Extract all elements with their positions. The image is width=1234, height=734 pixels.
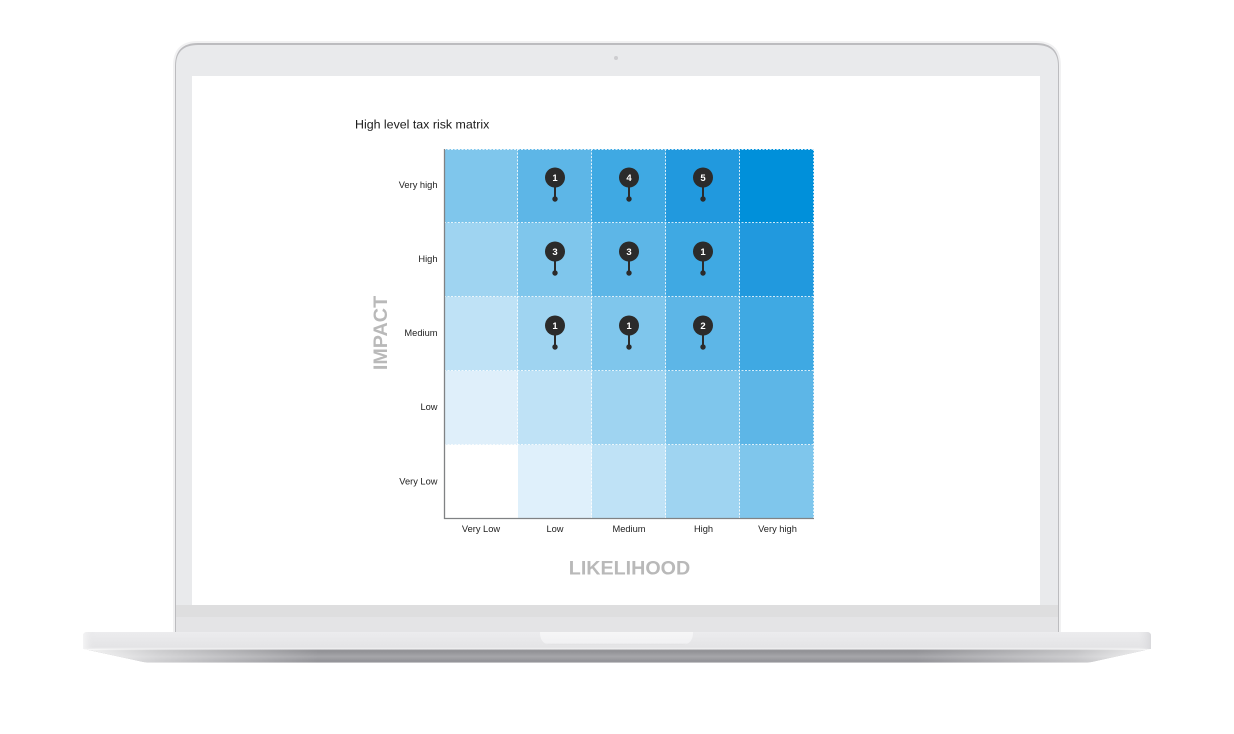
pin: medium likelihood, high impact — [619, 242, 639, 276]
impact axis title: IMPACT — [370, 296, 392, 370]
pin: high likelihood, very high impact: 5 — [700, 173, 706, 184]
pin: low likelihood, very high impact — [545, 168, 565, 202]
impact row labels: Very high — [399, 180, 438, 190]
likelihood column labels — [462, 524, 797, 534]
pin: medium likelihood, very high impact — [619, 168, 639, 202]
likelihood column labels: Medium — [612, 524, 646, 534]
likelihood column labels: Low — [546, 524, 564, 534]
pin: high likelihood, medium impact: 2 — [700, 321, 706, 332]
pin: high likelihood, very high impact — [693, 168, 713, 202]
chart title: High level tax risk matrix — [355, 118, 490, 132]
pin: low likelihood, medium impact — [545, 316, 565, 350]
pin: high likelihood, medium impact — [693, 316, 713, 350]
likelihood column labels: Very Low — [462, 524, 500, 534]
pin: high likelihood, high impact — [693, 242, 713, 276]
pin: low likelihood, high impact: 3 — [552, 247, 558, 258]
trackpad notch — [540, 632, 693, 645]
screen — [192, 76, 1040, 605]
pins — [545, 168, 713, 350]
pin: medium likelihood, high impact: 3 — [626, 247, 632, 258]
likelihood axis title: LIKELIHOOD — [569, 558, 690, 580]
likelihood column labels: High — [694, 524, 713, 534]
laptop — [83, 41, 1151, 663]
laptop base underside — [84, 649, 1150, 663]
laptop base — [83, 632, 1151, 649]
risk matrix — [370, 149, 814, 580]
laptop lid — [173, 41, 1061, 632]
likelihood column labels: Very high — [758, 524, 797, 534]
pin: medium likelihood, medium impact — [619, 316, 639, 350]
impact row labels — [399, 180, 438, 486]
pin: medium likelihood, very high impact: 4 — [626, 173, 632, 184]
camera — [614, 56, 618, 60]
pin: medium likelihood, medium impact: 1 — [626, 321, 632, 332]
impact row labels: Low — [420, 402, 438, 412]
axes — [444, 149, 814, 518]
pin: low likelihood, high impact — [545, 242, 565, 276]
impact row labels: Medium — [404, 328, 438, 338]
pin: high likelihood, high impact: 1 — [700, 247, 706, 258]
heatmap cells — [444, 149, 814, 519]
impact row labels: Very Low — [399, 476, 438, 486]
impact row labels: High — [418, 254, 438, 264]
pin: low likelihood, medium impact: 1 — [552, 321, 558, 332]
pin: low likelihood, very high impact: 1 — [552, 173, 558, 184]
